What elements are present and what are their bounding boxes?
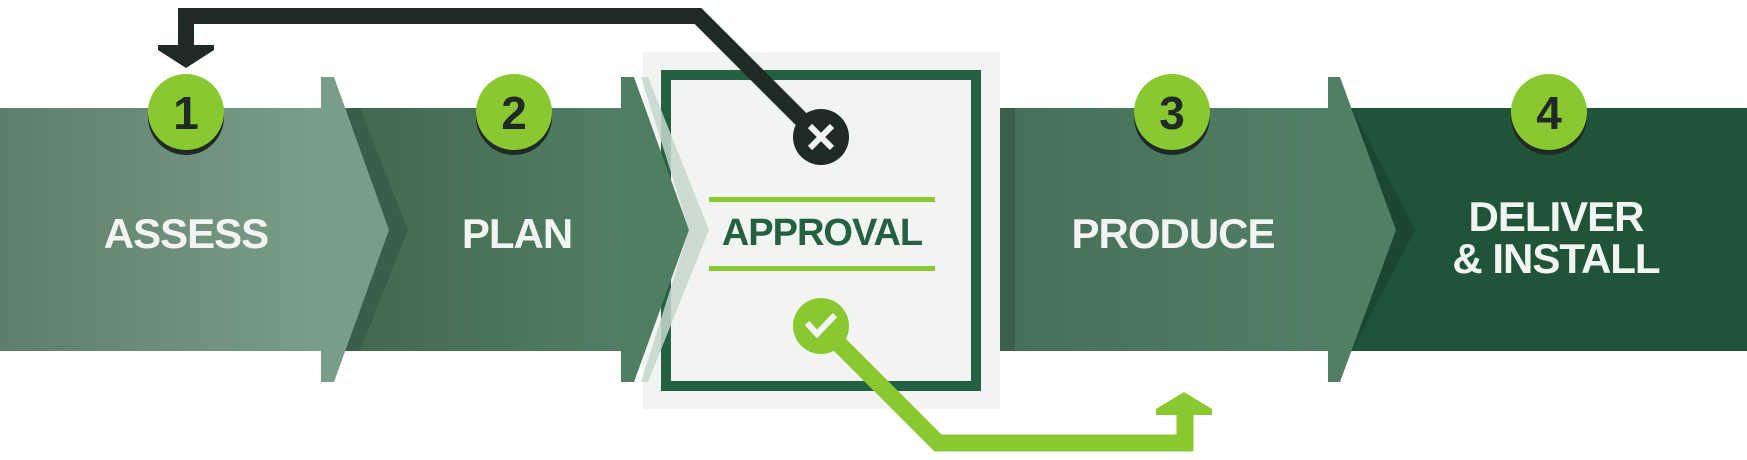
step badge 3: 3 <box>1159 87 1185 139</box>
panel: assess segment <box>0 77 389 382</box>
label: produce: PRODUCE <box>1071 210 1275 257</box>
step badge 4: 4 <box>1536 87 1562 139</box>
ghost arrow <box>641 77 709 382</box>
label: deliver & install: DELIVER <box>1468 193 1644 240</box>
step badge 2 <box>476 74 552 155</box>
divider lines <box>709 197 935 271</box>
icon: reject X <box>793 109 849 165</box>
step badge 4 <box>1511 74 1587 155</box>
step badge 2: 2 <box>501 87 527 139</box>
panel: plan segment <box>345 77 689 382</box>
panel: produce segment <box>1000 77 1396 382</box>
step badge 1: 1 <box>173 87 199 139</box>
step badge 3 <box>1134 74 1210 155</box>
step badge 1 <box>148 74 224 155</box>
label: plan: PLAN <box>462 210 572 257</box>
label: deliver & install: & INSTALL <box>1452 235 1660 282</box>
heading: approval: APPROVAL <box>722 212 923 254</box>
arrow: rejection loop back to assess <box>158 16 821 139</box>
panel: approval frame <box>666 75 976 386</box>
arrow: approval forward to produce <box>821 326 1212 443</box>
panel: deliver & install segment <box>1340 108 1747 351</box>
panel: approval background <box>643 52 1000 409</box>
label: assess: ASSESS <box>104 210 268 257</box>
icon: approve check <box>793 298 849 354</box>
